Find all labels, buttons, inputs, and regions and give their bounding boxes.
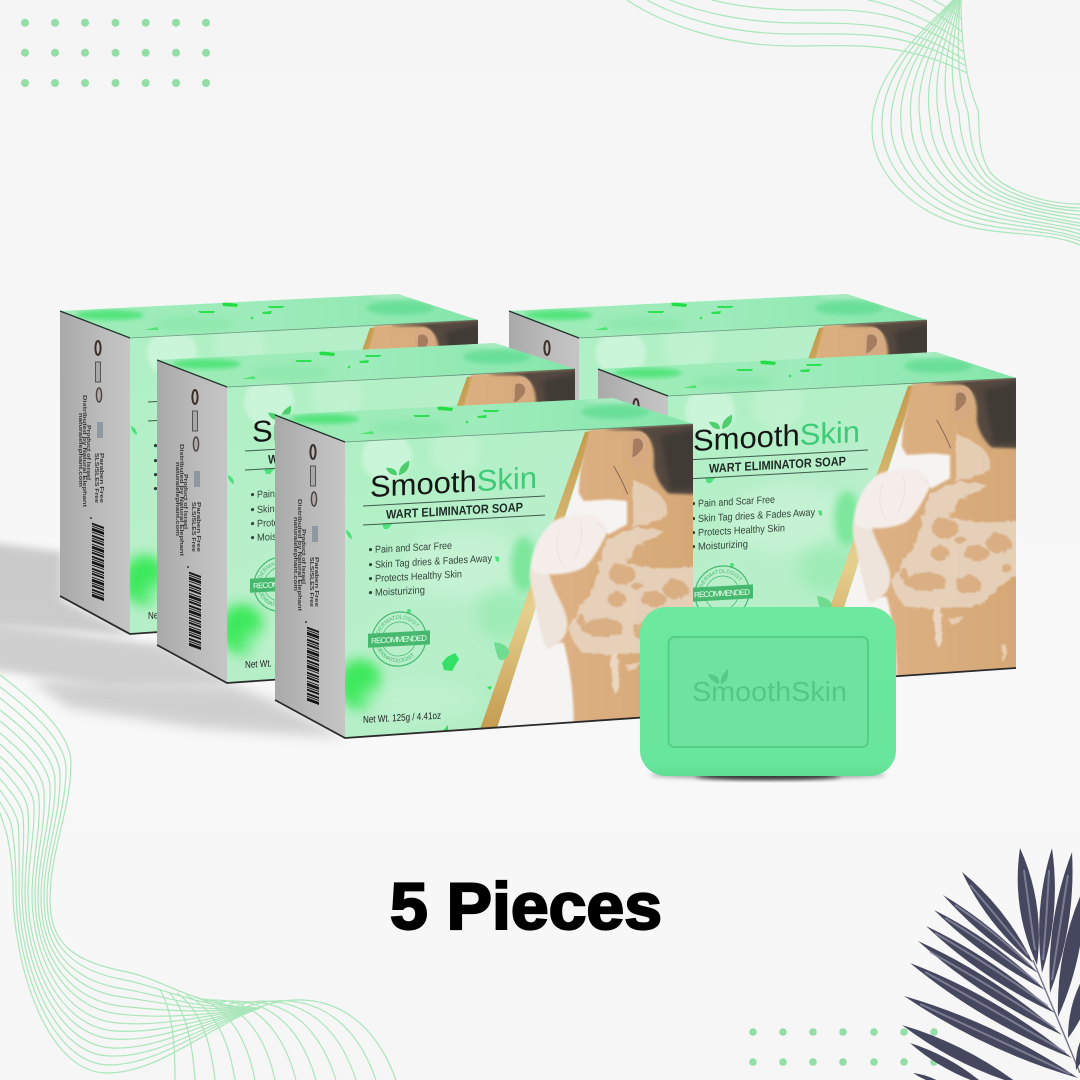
benefit list: Skin Tag dries & Fades Away: [375, 553, 493, 571]
front box label text: [363, 460, 545, 726]
dermatologist stamp: DERMATOLOGIST: [377, 647, 414, 662]
product name: WART ELIMINATOR SOAP: [386, 500, 523, 522]
middle left side panel text: SLS/SLES Free: [190, 502, 196, 552]
middle left box label text: WART ELIMINATOR SOAP: [268, 445, 405, 467]
middle left side panel text: Distributed by Natural Elephant: [178, 444, 184, 556]
middle right box label text: RECOMMENDED: [694, 587, 750, 600]
middle right box label text: Pain and Scar Free: [698, 495, 775, 510]
side panel text: [292, 499, 319, 611]
middle right box label text: [693, 414, 868, 607]
back left side panel text: SLS/SLES Free: [93, 453, 99, 503]
back right side panel text: naturalelephant.com: [526, 413, 532, 488]
leaf logo mark: [386, 460, 409, 476]
dermatologist stamp: [368, 611, 430, 667]
wave lines: bottom left: [0, 675, 396, 1080]
back right side panel text: Paraben Free: [547, 453, 553, 503]
middle left box label text: Moisturizing: [257, 530, 307, 544]
benefit list: Protects Healthy Skin: [375, 569, 462, 585]
floor shadows: [0, 541, 345, 738]
soap brand text: SmoothSkin: [692, 676, 847, 707]
box: middle left: [156, 343, 618, 724]
side panel text: Product of Israel: [300, 529, 306, 585]
wave lines: top right: [627, 0, 1080, 245]
dermatologist stamp: DERMATOLOGIST: [376, 615, 420, 634]
back right side panel text: [526, 395, 553, 507]
middle left side panel text: Paraben Free: [195, 502, 201, 552]
middle right box label text: SmoothSkin: [693, 416, 860, 458]
soap leaf mark: [708, 669, 728, 684]
side panel text: Distributed by Natural Elephant: [296, 499, 302, 611]
side panel text: naturalelephant.com: [292, 517, 298, 592]
middle left box label text: RECOMMENDED: [253, 578, 309, 591]
back right side panel text: Distributed by Natural Elephant: [530, 395, 536, 507]
middle right box label text: Protects Healthy Skin: [698, 523, 785, 539]
middle right box label text: DERMATOLOGIST: [699, 569, 742, 588]
title: 5 Pieces: [390, 869, 662, 943]
dots: top left: [21, 19, 210, 87]
back left side panel text: Paraben Free: [98, 453, 104, 503]
palm leaf highlights and stem: [920, 870, 1080, 1074]
dermatologist stamp: RECOMMENDED: [371, 633, 427, 646]
back left box label text: [148, 392, 330, 622]
middle right box label text: Moisturizing: [698, 539, 748, 553]
middle left box label text: Protects Healthy Skin: [257, 514, 344, 530]
middle left box label text: [245, 406, 419, 671]
middle left box label text: Skin Tag dries & Fades Away: [257, 498, 375, 516]
back left side panel text: Distributed by Natural Elephant: [81, 395, 87, 507]
box: back right: [509, 293, 929, 634]
middle left box label text: SmoothSkin: [252, 407, 419, 449]
back left side panel text: naturalelephant.com: [77, 413, 83, 488]
middle left box label text: DERMATOLOGIST: [259, 592, 275, 606]
benefit list: Pain and Scar Free: [375, 541, 452, 556]
back right side panel text: SLS/SLES Free: [542, 453, 548, 503]
soap shadow: [650, 771, 886, 780]
benefit list: Moisturizing: [375, 585, 425, 599]
middle left side panel text: naturalelephant.com: [174, 462, 180, 537]
middle left box label text: Net Wt. 125g / 4.41oz: [245, 656, 323, 671]
side panel text: Paraben Free: [313, 557, 319, 607]
middle left side panel text: Product of Israel: [182, 474, 188, 530]
benefit list: [369, 538, 493, 599]
side panel text: SLS/SLES Free: [308, 557, 314, 607]
back left side panel text: [77, 395, 104, 507]
net weight: Net Wt. 125g / 4.41oz: [363, 711, 441, 726]
leaf logo mark: [709, 414, 732, 430]
box: back left: [60, 293, 480, 634]
middle right box label text: Skin Tag dries & Fades Away: [698, 507, 816, 525]
box: middle right: [558, 352, 1016, 722]
soap bar: [640, 607, 896, 780]
dots: bottom right: [749, 1028, 938, 1066]
back left box label text: Net Wt. 125g / 4.41oz: [148, 607, 226, 622]
middle right box label text: WART ELIMINATOR SOAP: [709, 454, 846, 476]
middle left box label text: Pain and Scar Free: [257, 486, 334, 501]
middle left side panel text: [174, 444, 201, 556]
soap inset panel: [668, 637, 868, 747]
box: front: [274, 398, 693, 768]
back left side panel text: Product of Israel: [85, 425, 91, 481]
middle left box label text: DERMATOLOGIST: [258, 561, 275, 578]
back right side panel text: Product of Israel: [534, 425, 540, 481]
brand name: SmoothSkin: [370, 462, 537, 504]
soap body: [640, 607, 896, 776]
palm leaf: [902, 848, 1080, 1080]
